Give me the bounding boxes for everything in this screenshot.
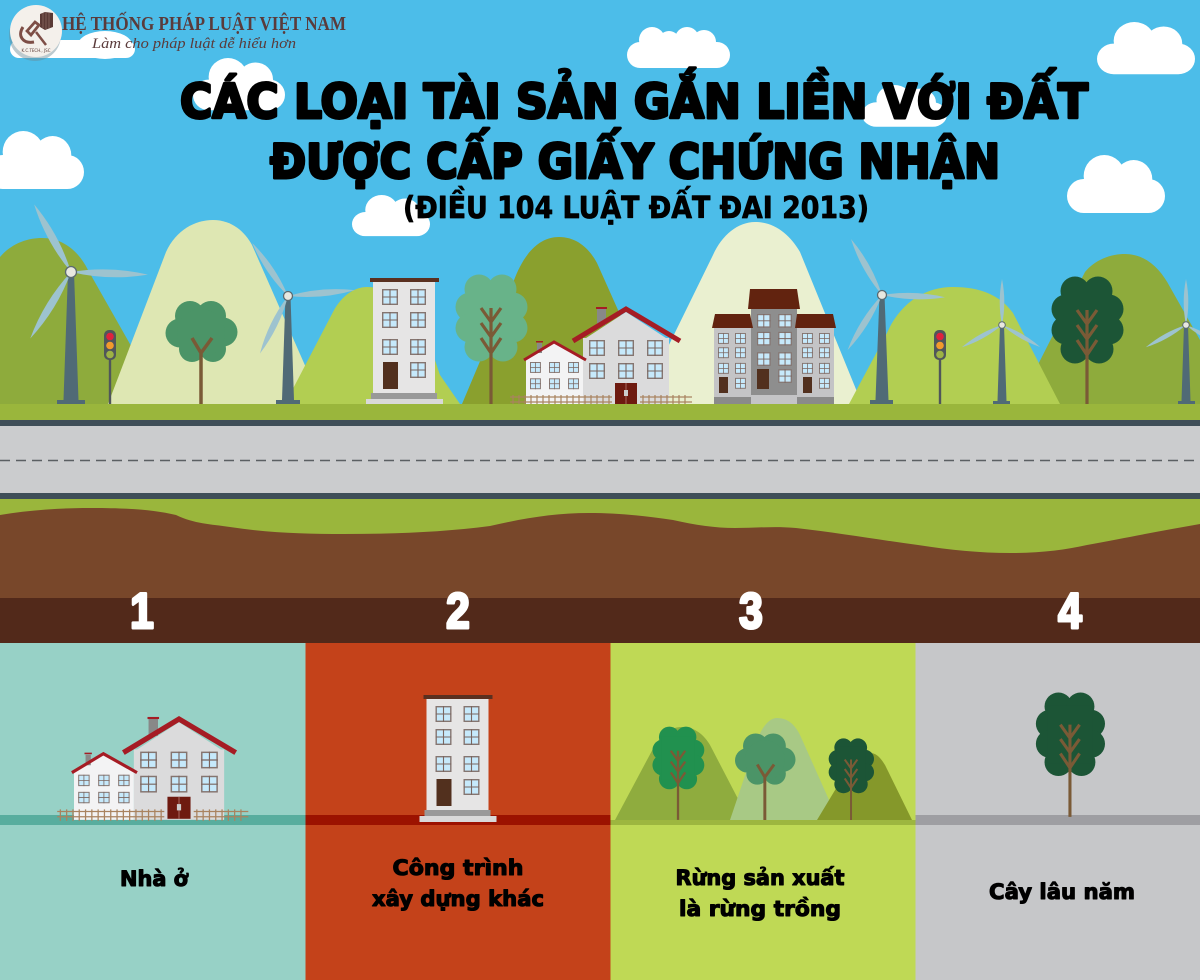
panel 2 background (306, 643, 610, 980)
wind turbine 2 (250, 241, 355, 404)
houses with fence (510, 307, 692, 406)
label: Rừng sản xuất là rừng trồng (676, 866, 844, 921)
apartment complex (712, 289, 836, 404)
wind turbine 5 (1145, 279, 1200, 404)
tree: light green (456, 274, 528, 404)
wind turbine 1 (27, 203, 148, 404)
title line 2: ĐƯỢC CẤP GIẤY CHỨNG NHẬN (270, 129, 1000, 190)
label: Cây lâu năm: Cây lâu năm (989, 880, 1135, 904)
traffic light right (934, 330, 946, 404)
label: Công trình xây dựng khác (372, 856, 544, 911)
number 3: 3 (739, 583, 763, 639)
number 2: 2 (446, 583, 470, 639)
road (0, 420, 1200, 499)
label: Nhà ở: Nhà ở (120, 867, 189, 891)
tree: round green (166, 301, 238, 404)
panel 3 background (610, 643, 916, 980)
panel 1 icon: houses (57, 717, 248, 821)
title line 1: CÁC LOẠI TÀI SẢN GẮN LIỀN VỚI ĐẤT (180, 69, 1088, 130)
clouds (0, 22, 1195, 236)
logo (9, 5, 62, 61)
wind turbine 3 (845, 237, 945, 404)
tree: dark green (1052, 276, 1124, 406)
tall building (366, 278, 443, 405)
panel 1 background (0, 643, 306, 980)
number 4: 4 (1058, 583, 1082, 639)
label: Công trình xây dựng khác: Công trình (392, 856, 524, 880)
grass strip (0, 404, 1200, 421)
subtitle: (ĐIỀU 104 LUẬT ĐẤT ĐAI 2013) (403, 185, 869, 226)
logo: K.C.TECH., JSC (22, 48, 51, 53)
ground bands (0, 815, 1200, 825)
number 1: 1 (130, 583, 154, 639)
panel 3 icon: forest (615, 718, 912, 820)
sky background (0, 0, 1200, 420)
panel 4 background (916, 643, 1200, 980)
wind turbine 4 (961, 279, 1041, 404)
traffic light left (104, 330, 116, 404)
label: Rừng sản xuất là rừng trồng: Rừng sản xuất (676, 866, 844, 890)
label: Rừng sản xuất là rừng trồng: là rừng trồng (679, 897, 841, 921)
soil layers (0, 499, 1200, 644)
label: Công trình xây dựng khác: xây dựng khác (372, 887, 544, 911)
hills (0, 220, 1200, 404)
panel 2 icon: building (420, 695, 496, 822)
panel 4 icon: tree (1036, 693, 1105, 817)
tagline: Làm cho pháp luật dễ hiểu hơn (91, 36, 296, 52)
organisation name: HỆ THỐNG PHÁP LUẬT VIỆT NAM (62, 11, 346, 35)
